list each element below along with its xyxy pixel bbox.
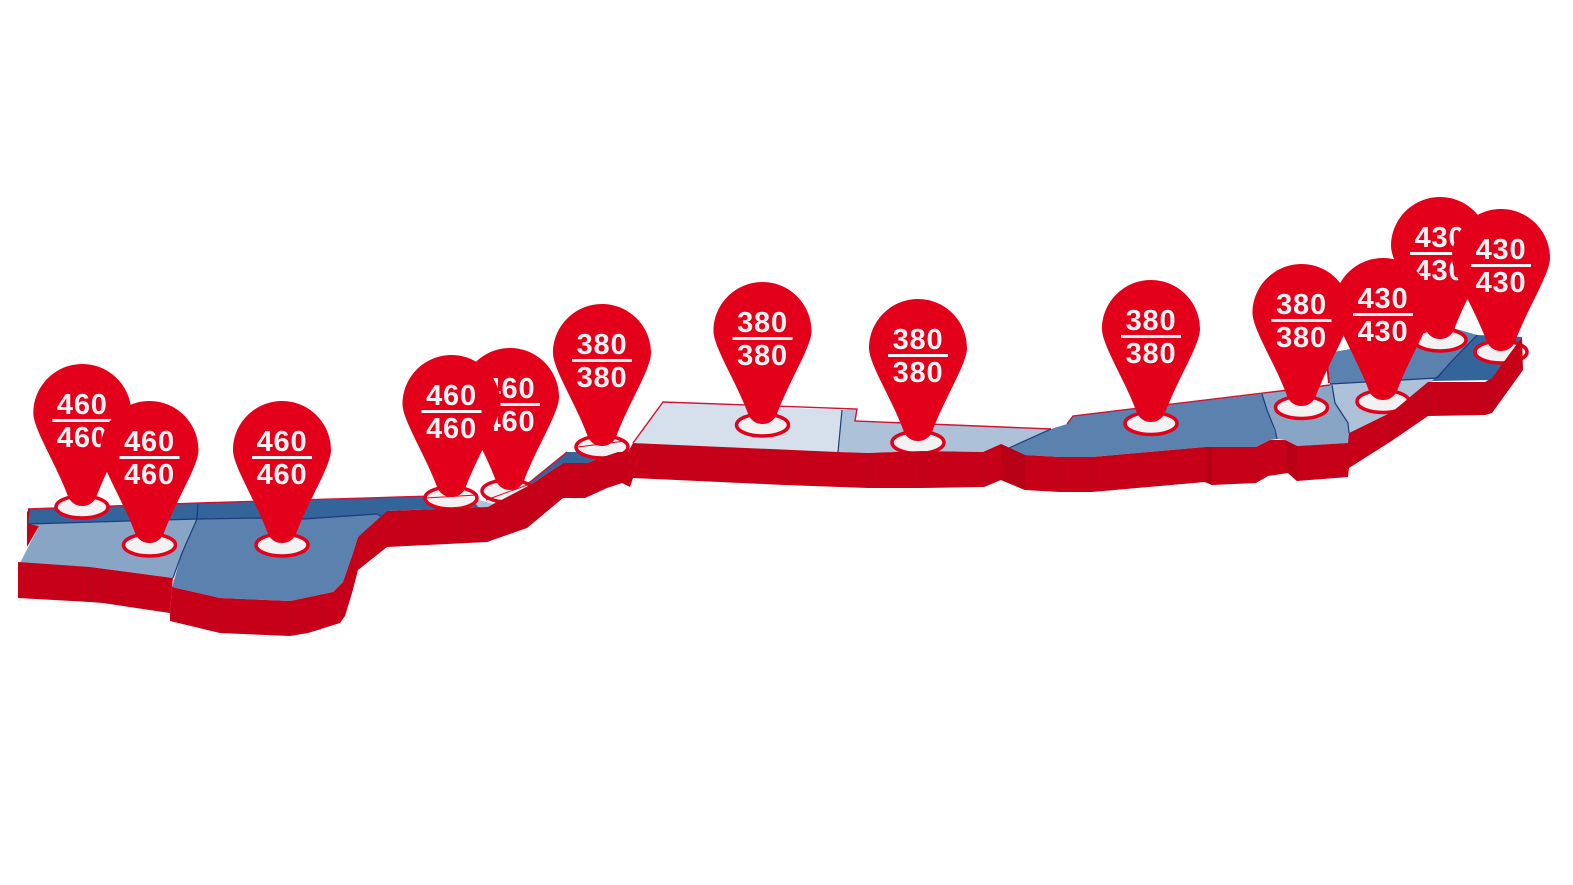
zone: right medium area <box>1009 394 1277 457</box>
zone: far-right dark area <box>1432 335 1522 381</box>
marker 1: 460/460: 460 <box>57 389 108 421</box>
zone: left light area <box>20 519 197 578</box>
zone: left medium area <box>172 514 382 601</box>
marker 3: 460/460 <box>233 401 331 543</box>
marker 7: 380/380: 380 <box>737 307 788 339</box>
marker 1: 460/460: 460 <box>57 422 108 454</box>
zone: central light area <box>838 409 1051 453</box>
wall: lower left front <box>170 511 387 636</box>
marker 10: 380/380: 380 <box>1276 322 1327 354</box>
marker 11: 430/430: 430 <box>1358 316 1408 348</box>
marker 4: 460/460: 460 <box>426 380 477 412</box>
location bases <box>56 329 1527 556</box>
marker 13: 430/430 <box>1452 209 1550 351</box>
marker 9: 380/380: 380 <box>1126 338 1176 370</box>
marker 11: 430/430 <box>1334 258 1432 400</box>
marker 5: 460/460: 460 <box>485 373 535 405</box>
marker 8: 380/380: 380 <box>893 324 943 356</box>
zone: right light area <box>1262 384 1349 446</box>
marker 2: 460/460 <box>100 401 198 543</box>
marker 4: 460/460 <box>402 355 500 497</box>
marker 2: 460/460: 460 <box>124 426 175 458</box>
marker 12: 430/430: 430 <box>1415 255 1465 287</box>
marker 4: 460/460: 460 <box>426 413 477 445</box>
marker 5: 460/460 <box>461 348 559 490</box>
wall: left back corner <box>27 508 39 547</box>
map walls: red extruded edge <box>18 337 1523 636</box>
thin red edge behind far-right zone <box>1326 352 1329 383</box>
map surface: route zones <box>20 328 1522 601</box>
marker 1: 460/460 <box>33 364 131 506</box>
zone: central pale area <box>633 402 842 452</box>
marker 3: 460/460: 460 <box>257 459 307 491</box>
zone: rising sliver <box>488 452 628 507</box>
marker 7: 380/380: 380 <box>737 340 788 372</box>
marker 6: 380/380: 380 <box>577 362 627 394</box>
marker 8: 380/380 <box>869 299 967 441</box>
marker 12: 430/430 <box>1391 197 1489 339</box>
zone: small light area <box>472 498 494 508</box>
zone: right pale area <box>1332 378 1437 433</box>
marker 8: 380/380: 380 <box>893 357 943 389</box>
marker 10: 380/380 <box>1252 264 1350 406</box>
marker 6: 380/380 <box>553 304 651 446</box>
marker 9: 380/380 <box>1102 280 1200 422</box>
wall: middle left <box>387 443 633 547</box>
marker 3: 460/460: 460 <box>257 426 307 458</box>
marker 2: 460/460: 460 <box>124 459 175 491</box>
marker 13: 430/430: 430 <box>1476 234 1526 266</box>
marker 11: 430/430: 430 <box>1358 283 1408 315</box>
wall: central and right <box>633 337 1523 492</box>
zone: far-left back strip <box>28 495 488 524</box>
marker 10: 380/380: 380 <box>1276 289 1327 321</box>
zone: far-right medium area <box>1327 328 1477 384</box>
marker 9: 380/380: 380 <box>1126 305 1176 337</box>
marker 13: 430/430: 430 <box>1476 267 1526 299</box>
marker 5: 460/460: 460 <box>485 406 535 438</box>
wall: left front <box>18 562 173 613</box>
marker 6: 380/380: 380 <box>577 329 627 361</box>
wall: darker facets <box>1001 440 1297 490</box>
marker 7: 380/380 <box>714 282 812 424</box>
marker 12: 430/430: 430 <box>1415 222 1465 254</box>
